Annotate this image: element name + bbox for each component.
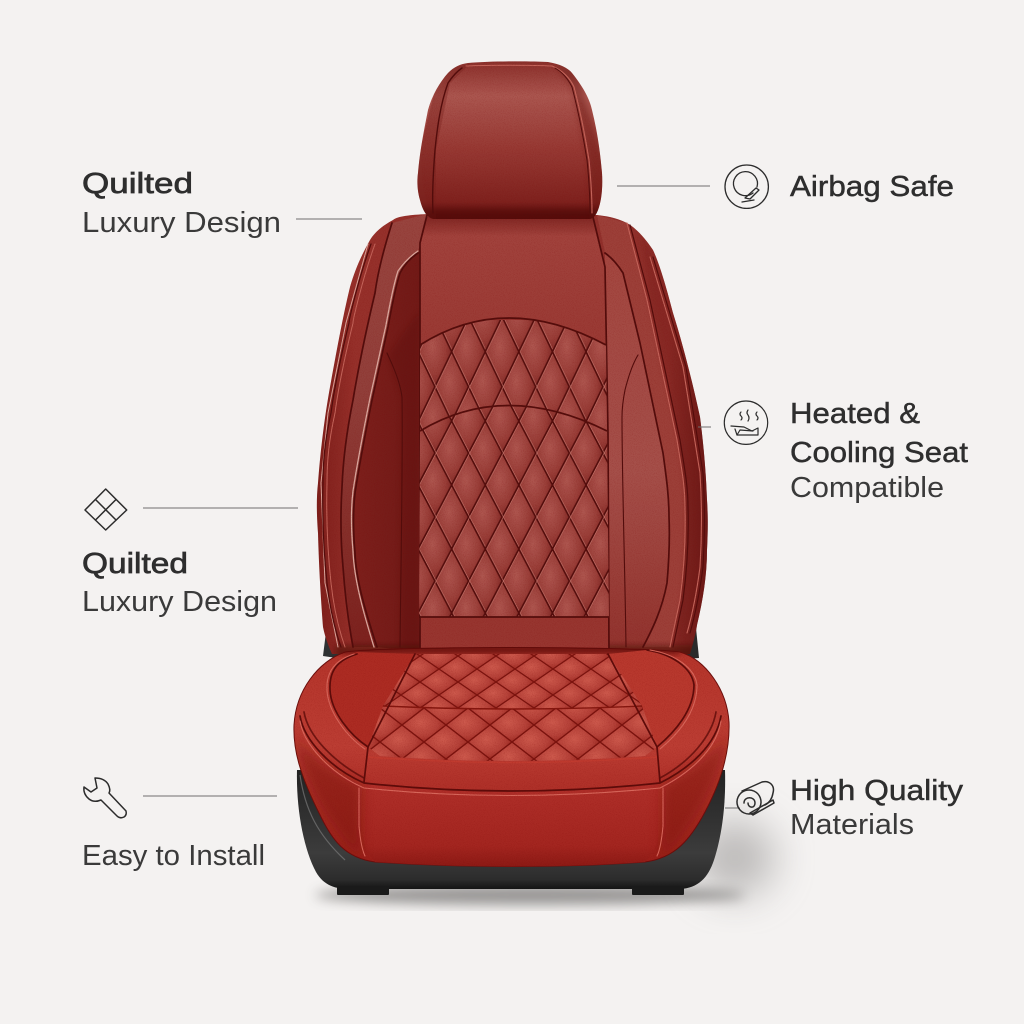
right side bolster: [608, 650, 694, 747]
callout: quilted left: Quilted: [82, 548, 188, 580]
leather grain overlay: [294, 61, 729, 867]
icon: airbag: [725, 165, 768, 208]
seat cushion: [294, 645, 729, 866]
right outer shading: [642, 236, 708, 642]
cushion seams: [300, 650, 721, 856]
label: airbag safe: Airbag Safe: [790, 171, 954, 203]
callout: quilted top left: Luxury Design: [82, 207, 281, 239]
callout: easy to install: Easy to Install: [82, 840, 265, 872]
label: heated and cooling: Heated &: [790, 398, 920, 430]
backrest centre panel: [420, 217, 607, 345]
left bolster band between seams: [341, 214, 427, 647]
left dark inner panel: [354, 243, 420, 652]
right centre bolster band: [597, 215, 685, 647]
seat illustration: [294, 61, 729, 895]
callout: airbag safe: [617, 165, 768, 208]
callout: high quality materials: [725, 775, 964, 841]
callout: easy to install: [82, 778, 277, 872]
label: heated and cooling: Compatible: [790, 472, 944, 504]
callout: quilted top left: [82, 168, 362, 239]
left side panel shadow: [392, 326, 416, 642]
right light panel: [605, 254, 668, 613]
black seat base: [297, 628, 725, 895]
headrest: [415, 61, 608, 225]
backrest seams: [321, 215, 704, 652]
cushion front panel: [362, 784, 662, 866]
callout: quilted left: Luxury Design: [82, 586, 277, 618]
icon: heated seat: [724, 401, 768, 444]
icon: fabric roll: [734, 782, 774, 817]
lower strip: [419, 617, 609, 652]
quilted backrest panel: [415, 318, 615, 620]
drop shadow under seat: [315, 820, 775, 905]
cushion side shading: [294, 645, 729, 860]
cushion center quilted panel: [368, 654, 657, 760]
callout: quilted top left: Quilted: [82, 168, 193, 200]
backrest: [317, 214, 712, 659]
callout: heated and cooling: [698, 401, 768, 444]
label: heated and cooling: [790, 398, 968, 504]
callout: high quality materials: High Quality: [790, 775, 964, 807]
callout: high quality materials: Materials: [790, 809, 914, 841]
left side bolster: [330, 652, 415, 747]
label: heated and cooling: Cooling Seat: [790, 437, 968, 469]
callout: quilted left: [82, 489, 298, 618]
icon: quilted diamond: [85, 489, 127, 530]
icon: wrench: [84, 778, 126, 818]
